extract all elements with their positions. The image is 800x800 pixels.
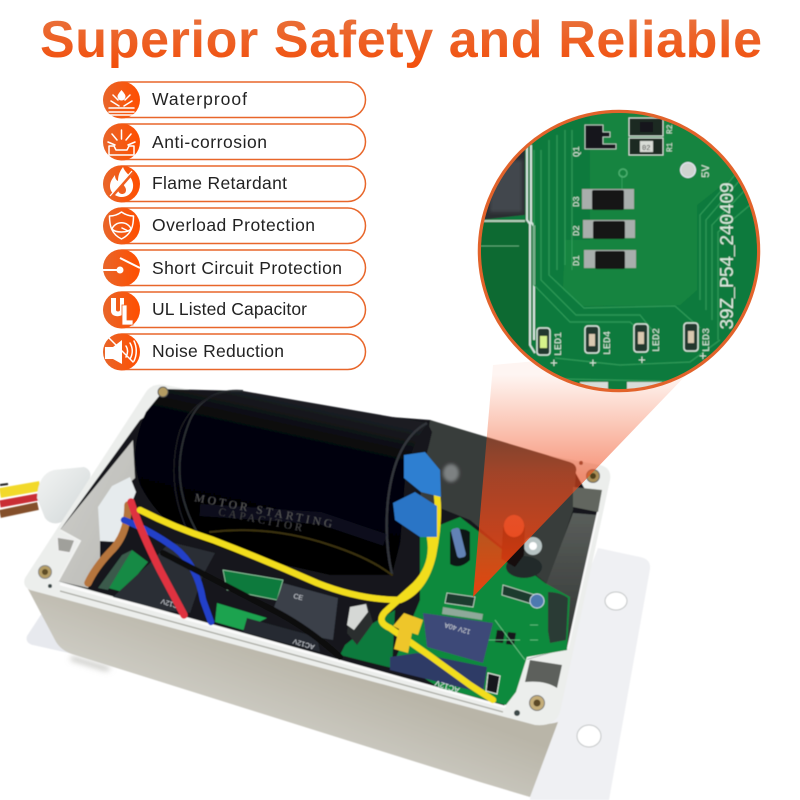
LEDs: LED4 <box>603 331 614 355</box>
feature: Anti-corrosion <box>103 124 366 160</box>
feature: Anti-corrosion: Anti-corrosion <box>152 132 267 152</box>
relays: 12V 40A <box>443 621 472 635</box>
internal wires <box>88 495 493 700</box>
feature: UL Listed Capacitor: UL Listed Capacitor <box>152 299 307 319</box>
capacitor: CAPACITOR <box>217 506 304 534</box>
resistors <box>629 118 675 155</box>
magnified circuit board circle <box>479 112 759 392</box>
LEDs <box>537 323 713 371</box>
interior walls and floor <box>57 400 602 712</box>
feature: Waterproof <box>103 82 366 118</box>
enclosure rim <box>24 385 610 725</box>
LEDs: LED2 <box>652 328 663 352</box>
feature: Noise Reduction <box>103 334 366 370</box>
transistor Q1: Q1 <box>572 146 582 157</box>
diodes D3 D2 D1 <box>572 189 636 269</box>
feature: Noise Reduction: Noise Reduction <box>152 341 284 361</box>
capacitor <box>135 389 432 575</box>
feature: Overload Protection: Overload Protection <box>152 215 315 235</box>
mounting flanges <box>27 548 650 800</box>
diodes D3 D2 D1: D1 <box>572 255 582 266</box>
resistors: 02 <box>642 145 650 153</box>
gland nut <box>98 477 136 542</box>
feature: Short Circuit Protection <box>103 250 366 286</box>
LEDs: LED1 <box>554 332 565 356</box>
screws <box>38 387 600 716</box>
LEDs: LED3 <box>702 328 713 352</box>
feature: Short Circuit Protection: Short Circuit Protection <box>152 258 342 278</box>
LEDs: + <box>699 349 707 364</box>
copper traces <box>520 130 750 382</box>
relays: AC12V <box>433 678 461 695</box>
external cables <box>0 484 40 514</box>
board code: 39Z_P54_240409 <box>717 182 739 330</box>
feature: Waterproof: Waterproof <box>152 89 247 109</box>
diodes D3 D2 D1: D3 <box>572 196 582 207</box>
title: Superior Safety and Reliable <box>40 11 762 69</box>
wire connectors <box>393 452 441 653</box>
LEDs: + <box>589 356 597 371</box>
feature: UL Listed Capacitor <box>103 292 366 328</box>
circuit board <box>98 515 570 705</box>
transistor Q1 <box>572 125 616 157</box>
resistors: R1 <box>666 142 675 152</box>
relays: CE <box>293 593 304 602</box>
relays: AC12V <box>292 637 316 650</box>
feature list <box>103 82 366 370</box>
feature: Flame Retardant <box>103 166 366 202</box>
capacitor label: MOTOR STARTING <box>193 492 333 531</box>
LEDs: + <box>550 356 558 371</box>
feature: Flame Retardant: Flame Retardant <box>152 173 287 193</box>
board areas <box>479 112 759 392</box>
diodes D3 D2 D1: D2 <box>572 225 582 236</box>
resistors: R2 <box>666 124 675 134</box>
test pad 5V: 5V <box>701 164 713 178</box>
front face of enclosure <box>27 587 558 797</box>
magnifier beam <box>473 345 715 597</box>
relays <box>113 542 493 695</box>
LEDs: + <box>638 353 646 368</box>
relays: AC12V <box>160 597 184 610</box>
feature: Overload Protection <box>103 208 366 244</box>
product photo: open enclosure with capacitor <box>0 385 650 800</box>
cable gland <box>37 467 90 523</box>
test pad 5V <box>619 162 713 178</box>
